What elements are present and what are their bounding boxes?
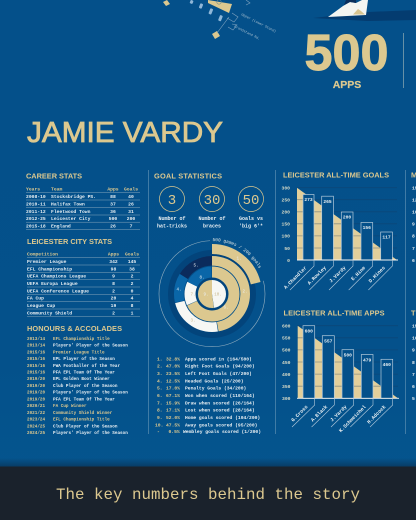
list: honours: Community Shield Winner xyxy=(53,411,113,416)
list: goal breakdown: Left Foot Goals (47/200) xyxy=(185,371,252,377)
list: goal breakdown: 10. xyxy=(155,422,163,428)
table: leicester city stats: UEFA Conference League xyxy=(27,288,89,294)
list: honours: PFA EPL Team Of The Year xyxy=(53,397,115,402)
table: career stats: 200 xyxy=(127,216,135,222)
table: leicester city stats: Goals xyxy=(125,252,139,258)
list: goal breakdown: Away goals scored (95/200) xyxy=(185,422,257,428)
list: honours: EPL Golden Boot Winner xyxy=(53,377,110,382)
bar chart: all-time goals: J.Vardy xyxy=(328,265,347,284)
list: honours: Club Player of the Season xyxy=(53,424,118,429)
stat: hat-tricks: Number of xyxy=(158,216,186,222)
list: honours: 2015/16 xyxy=(27,357,45,362)
table: career stats: Goals xyxy=(124,187,138,193)
list: goal breakdown: 2. xyxy=(157,364,163,370)
table: leicester city stats: Competition xyxy=(27,252,58,258)
radial chart: 1. xyxy=(236,258,242,262)
table: leicester city stats: 38 xyxy=(129,266,135,272)
table: leicester city stats: League Cup xyxy=(27,303,55,309)
radial chart: 10. xyxy=(214,294,222,298)
bar chart: all-time apps: 500 xyxy=(282,348,291,354)
list: goal breakdown: 3. xyxy=(157,371,163,377)
list: honours: 2019/20 xyxy=(27,391,45,396)
list: honours: 2015/16 xyxy=(27,364,45,369)
list: honours xyxy=(27,337,128,436)
table: leicester city stats: Premier League xyxy=(27,259,67,265)
caption text: The key numbers behind the story xyxy=(56,486,360,504)
clipped panels at right edge: 9 xyxy=(412,222,415,228)
bar chart: all-time apps: 400 xyxy=(282,372,291,378)
table: leicester city stats: 2 xyxy=(112,288,115,294)
table: career stats: 2015-18 xyxy=(26,224,46,230)
list: goal breakdown: Home goals scored (104/200) xyxy=(185,415,260,421)
radial chart xyxy=(158,238,266,347)
table: leicester city stats: 145 xyxy=(128,259,136,265)
bar chart: all-time apps: 600 xyxy=(282,324,291,330)
radial chart: 2. xyxy=(242,290,248,294)
list: goal breakdown: 6. xyxy=(157,393,163,399)
bar chart: all-time apps: 600 xyxy=(305,328,313,334)
clipped panels at right edge xyxy=(411,171,416,402)
clipped panels at right edge: T xyxy=(411,309,416,318)
stat: 500 apps: 500 xyxy=(304,24,388,81)
bar chart: all-time goals: 300 xyxy=(282,186,290,192)
bar chart: all-time apps xyxy=(282,324,399,434)
stat: goals vs big 6: Goals vs xyxy=(239,216,263,222)
bar chart: all-time goals: E.Hine xyxy=(350,265,367,282)
table: career stats: Years xyxy=(26,187,40,193)
clipped panels at right edge: 8 xyxy=(412,234,415,240)
bar chart: all-time apps: K.Schmeichel xyxy=(338,404,368,434)
stat: braces xyxy=(198,186,226,230)
table: career stats: 31 xyxy=(128,209,134,215)
title: JAMIE VARDY xyxy=(27,117,223,149)
table: leicester city stats: 98 xyxy=(111,266,116,272)
table: leicester city stats: 2 xyxy=(112,310,115,316)
bar chart: all-time apps: J.Vardy xyxy=(329,404,348,423)
clipped panels at right edge: 5 xyxy=(412,396,415,402)
list: honours: Players' Player of the Season xyxy=(53,431,128,436)
list: goal breakdown: 0.5% xyxy=(168,429,180,435)
table: leicester city stats: Community Shield xyxy=(27,310,72,316)
list: honours: FWA Footballer of the Year xyxy=(53,364,120,369)
panel: career stats xyxy=(26,172,140,230)
list: honours: 2015/16 xyxy=(27,350,45,355)
table: leicester city stats: 342 xyxy=(109,259,118,265)
bar chart: all-time goals: 117 xyxy=(382,234,391,240)
table: career stats: Team xyxy=(51,187,62,193)
table: career stats: 2012-25 xyxy=(26,216,46,222)
list: goal breakdown xyxy=(155,356,261,435)
list: goal breakdown: 47.0% xyxy=(166,364,180,370)
list: honours: 2020/21 xyxy=(27,404,45,409)
radial chart: 6. xyxy=(223,306,229,310)
table: leicester city stats: UEFA Europa League xyxy=(27,281,78,287)
list: goal breakdown: Won when scored (110/164) xyxy=(185,393,255,399)
bar chart: all-time goals: A.Rowley xyxy=(307,265,328,286)
list: honours: EPL Player of the Season xyxy=(53,357,115,362)
stat: hat-tricks: hat-tricks xyxy=(157,224,187,230)
table: leicester city stats: 1 xyxy=(131,310,134,316)
list: goal breakdown: 17.0% xyxy=(166,386,180,392)
list: goal breakdown: 32.8% xyxy=(166,356,180,362)
table: leicester city stats: 19 xyxy=(111,303,116,309)
table: career stats: 500 xyxy=(109,216,117,222)
panel: honours and accolades xyxy=(27,324,128,436)
bar chart: all-time goals: 50 xyxy=(284,246,290,252)
stat: hat-tricks: 3 xyxy=(168,193,176,209)
list: honours: 2015/16 xyxy=(27,370,45,376)
radial chart: 5. xyxy=(193,264,199,268)
list: goal breakdown: Draw when scored (26/164) xyxy=(185,400,255,406)
table: leicester city stats: 4 xyxy=(131,296,134,302)
table: career stats: Leicester City xyxy=(51,216,91,222)
table: career stats: 88 xyxy=(110,194,116,200)
clipped panels at right edge: 8 xyxy=(412,360,415,366)
list: honours: 2023/24 xyxy=(27,418,45,422)
stadium map fragment xyxy=(163,0,277,42)
bar chart: all-time apps: 350 xyxy=(282,384,291,390)
bar chart: all-time apps: H.Adcock xyxy=(366,404,387,425)
list: honours: PFA EPL Team Of The Year xyxy=(53,370,115,376)
bar chart: all-time goals: 200 xyxy=(343,214,351,220)
bar chart: all-time goals xyxy=(282,186,398,291)
list: honours: 2021/22 xyxy=(27,411,45,416)
bar chart: all-time apps: 557 xyxy=(324,338,333,344)
list: goal breakdown: 7. xyxy=(157,400,163,406)
table: leicester city stats: FA Cup xyxy=(27,296,44,302)
table: leicester city stats: 8 xyxy=(112,281,115,287)
heading: all-time apps: LEICESTER ALL-TIME APPS xyxy=(284,309,385,318)
bar chart: all-time goals: 150 xyxy=(282,222,290,228)
list: honours: Players' Player of the Season xyxy=(53,344,128,349)
bar chart: all-time goals: A.Chandler xyxy=(283,265,308,291)
caption band xyxy=(0,466,416,520)
stadium map fragment: Grandstand Rd. xyxy=(233,24,261,42)
list: honours: 2024/25 xyxy=(27,424,45,429)
list: honours: EFL Championship Title xyxy=(53,337,110,342)
list: goal breakdown: 15.9% xyxy=(166,400,180,406)
list: honours: FA Cup Winner xyxy=(53,404,87,409)
list: goal breakdown: 8. xyxy=(157,408,163,414)
bar chart: all-time apps: 550 xyxy=(282,336,291,342)
table: career stats: 26 xyxy=(128,201,134,207)
stat: braces: 30 xyxy=(204,193,220,209)
table: leicester city stats: UEFA Champions League xyxy=(27,274,86,280)
heading: career stats: CAREER STATS xyxy=(26,172,82,180)
table: career stats: Fleetwood Town xyxy=(51,209,91,215)
illustration: boot and shadow xyxy=(313,0,416,21)
stadium map fragment: Upper (Lower Stand) xyxy=(240,12,277,34)
bar chart: all-time apps: 300 xyxy=(282,396,291,402)
table: career stats: 2011-12 xyxy=(26,209,46,215)
clipped panels at right edge: 7 xyxy=(412,372,415,378)
list: honours: Club Player of the Season xyxy=(53,384,118,389)
bar chart: all-time apps: 460 xyxy=(383,362,391,368)
stat: braces: braces xyxy=(203,224,221,230)
bar chart: all-time goals: 273 xyxy=(304,197,313,203)
list: goal breakdown: 5. xyxy=(157,386,163,392)
list: goal breakdown: 4. xyxy=(157,378,163,384)
table: career stats: 2008-10 xyxy=(26,194,46,200)
list: goal breakdown: 12.5% xyxy=(166,378,180,384)
table: career stats: Stocksbridge PS. xyxy=(51,194,96,200)
list: goal breakdown: - xyxy=(157,430,160,435)
bar chart: all-time goals: 250 xyxy=(282,198,290,204)
clipped panels at right edge: 7 xyxy=(412,246,415,252)
table: leicester city stats: EFL Championship xyxy=(27,266,72,272)
radial chart: 4. xyxy=(176,288,182,292)
table: career stats: England xyxy=(51,224,71,230)
table: leicester city stats: 2 xyxy=(131,274,134,280)
list: goal breakdown: 17.1% xyxy=(166,408,180,414)
bar chart: all-time apps: G.Cross xyxy=(290,404,309,423)
list: goal breakdown: Headed Goals (25/200) xyxy=(185,378,243,384)
table: leicester city stats: Apps xyxy=(108,252,119,258)
stat: goals vs big 6: 'big 6'* xyxy=(239,224,263,230)
heading: all-time goals: LEICESTER ALL-TIME GOALS xyxy=(283,171,389,180)
stat: goals vs big 6: 50 xyxy=(243,193,259,209)
table: leicester city stats: 8 xyxy=(131,303,134,309)
radial chart: 500 games / 200 goals xyxy=(212,238,261,268)
bar chart: all-time goals: 265 xyxy=(323,199,332,205)
panel: goal statistics xyxy=(154,172,266,435)
stat: 500 apps: APPS xyxy=(333,79,361,91)
list: goal breakdown: 47.5% xyxy=(166,422,180,428)
list: honours: EFL Championship Title xyxy=(53,418,110,422)
table: leicester city stats: 20 xyxy=(111,296,116,302)
list: goal breakdown: 52.0% xyxy=(166,415,180,421)
list: honours: Players' Player of the Season xyxy=(53,391,128,396)
list: honours: 2019/20 xyxy=(27,377,45,382)
table: career stats: 36 xyxy=(110,209,116,215)
bar chart: all-time goals: 100 xyxy=(282,234,290,240)
list: honours: 2019/20 xyxy=(27,397,45,402)
radial chart: 3. xyxy=(190,320,196,324)
table: leicester city stats: 9 xyxy=(112,274,115,280)
table: leicester city stats xyxy=(27,252,140,316)
radial chart: 8. xyxy=(199,276,205,280)
radial chart: 9. xyxy=(203,294,209,298)
bar chart: all-time goals: 200 xyxy=(282,210,290,216)
table: career stats xyxy=(26,187,140,230)
list: goal breakdown: 1. xyxy=(157,356,163,362)
stat: goals vs big 6 xyxy=(238,186,264,230)
heading: goal statistics: GOAL STATISTICS xyxy=(154,172,222,180)
table: career stats: Apps xyxy=(107,187,119,193)
table: career stats: 40 xyxy=(128,194,134,200)
stat: braces: Number of xyxy=(198,216,226,222)
heading: leicester city stats: LEICESTER CITY STATS xyxy=(27,237,112,246)
table: career stats: 7 xyxy=(130,224,133,230)
radial chart: 7. xyxy=(190,294,196,298)
table: career stats: Halifax Town xyxy=(51,201,85,207)
panel: leicester city stats xyxy=(27,237,140,316)
clipped panels at right edge: 6 xyxy=(412,384,415,390)
list: honours: 2013/14 xyxy=(27,337,45,342)
list: goal breakdown: 23.5% xyxy=(166,371,180,377)
list: goal breakdown: 9. xyxy=(157,415,163,421)
clipped panels at right edge: 6 xyxy=(412,258,415,264)
bar chart: all-time apps: 479 xyxy=(363,357,372,363)
list: goal breakdown: Wembley goals scored (1/200) xyxy=(183,429,261,435)
clipped panels at right edge: 9 xyxy=(412,348,415,354)
list: goal breakdown: Right Foot Goals (94/200) xyxy=(185,364,255,370)
list: goal breakdown: Apps scored in (164/500) xyxy=(185,356,252,362)
table: career stats: 2010-11 xyxy=(26,201,46,207)
bar chart: all-time apps: A.Black xyxy=(310,404,329,423)
list: goal breakdown: 67.1% xyxy=(166,393,180,399)
table: leicester city stats: 0 xyxy=(131,288,134,294)
bar chart: all-time goals: 0 xyxy=(287,258,290,264)
list: honours: 2024/25 xyxy=(27,431,45,436)
panel: leicester all-time apps xyxy=(282,309,399,434)
divider beside 500 apps xyxy=(402,33,405,88)
list: honours: 2013/14 xyxy=(27,344,45,349)
stat: hat-tricks xyxy=(157,186,187,230)
list: honours: 2019/20 xyxy=(27,384,45,389)
bar chart: all-time apps: 450 xyxy=(282,360,291,366)
list: goal breakdown: Lost when scored (28/164) xyxy=(185,408,255,414)
panel: leicester all-time goals xyxy=(282,171,398,291)
bar chart: all-time goals: 156 xyxy=(363,225,371,231)
table: career stats: 26 xyxy=(110,224,116,230)
list: goal breakdown: Penalty Goals (34/200) xyxy=(185,386,246,392)
heading: honours and accolades: HONOURS & ACCOLADES xyxy=(27,324,122,333)
list: honours: Premier League Title xyxy=(53,350,105,355)
table: leicester city stats: 2 xyxy=(131,281,134,287)
bar chart: all-time apps: 500 xyxy=(344,352,352,358)
table: career stats: 37 xyxy=(110,201,116,207)
bar chart: all-time goals: D.Hines xyxy=(368,265,387,284)
